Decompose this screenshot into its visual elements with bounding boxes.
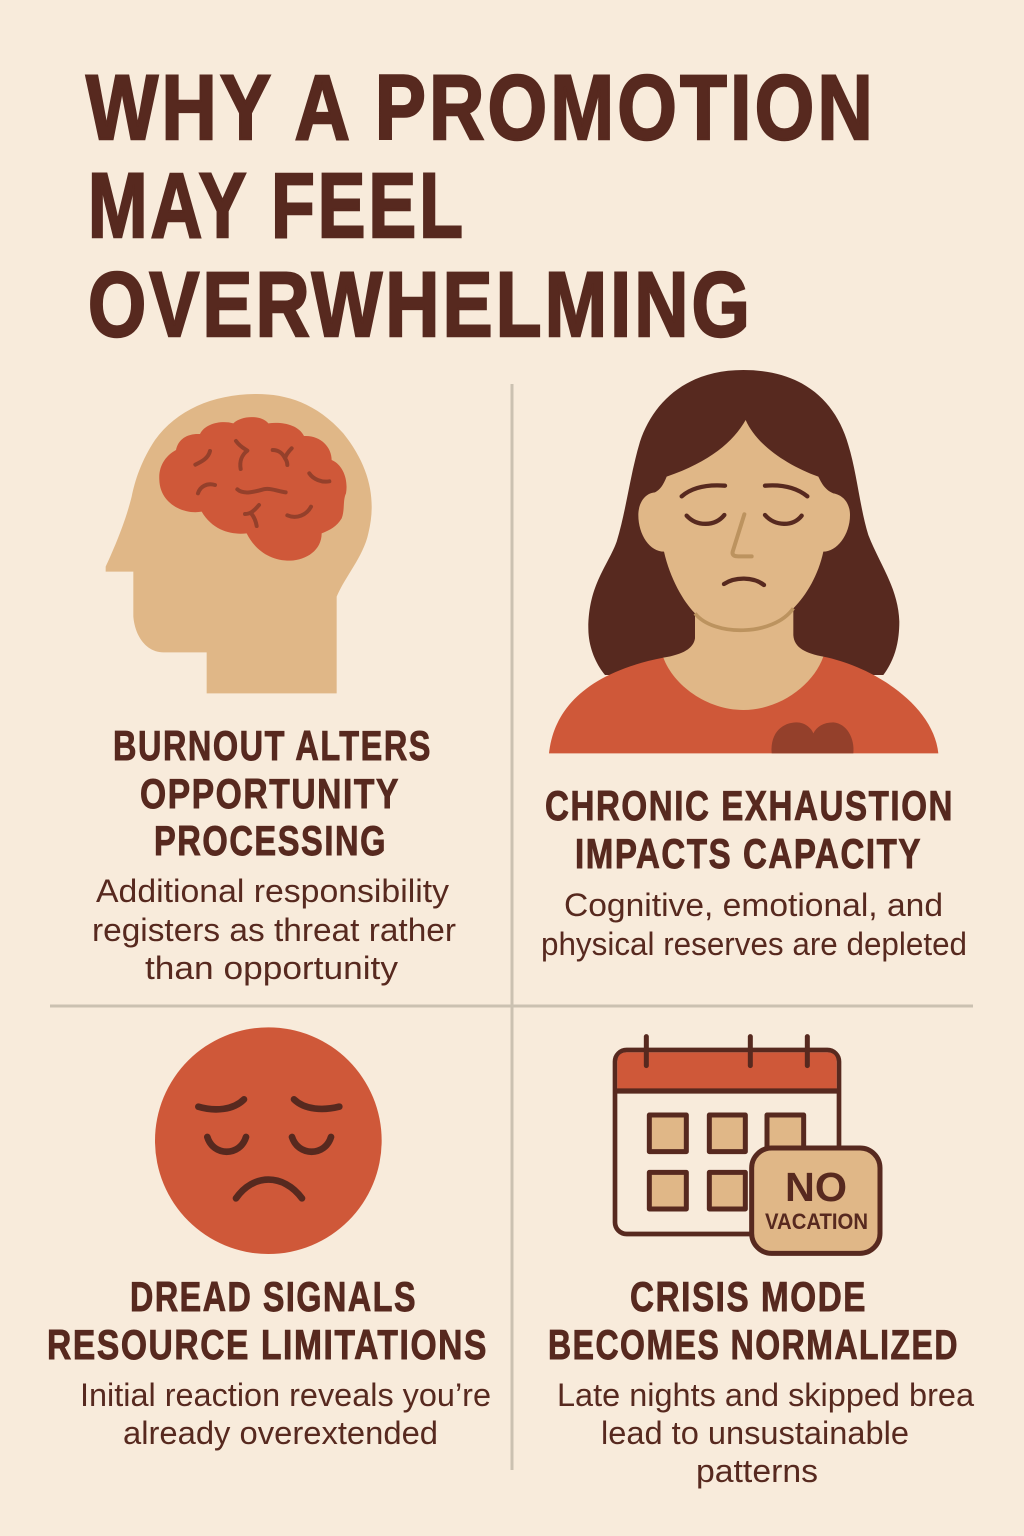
text block xyxy=(541,887,967,962)
title xyxy=(86,57,876,356)
text block: Additional responsibility xyxy=(96,873,449,909)
title: MAY FEEL xyxy=(88,155,466,257)
icon: head with brain xyxy=(106,394,372,693)
text block: than opportunity xyxy=(145,950,398,986)
text block xyxy=(557,1377,974,1489)
text block: physical reserves are depleted xyxy=(541,926,967,962)
heading: DREAD SIGNALS xyxy=(130,1273,417,1320)
panel: dread signals resource limitations xyxy=(47,1027,491,1451)
text block xyxy=(92,873,456,986)
panel: burnout alters opportunity processing xyxy=(92,394,456,986)
text block: already overextended xyxy=(123,1415,438,1451)
icon: tired woman xyxy=(549,370,938,753)
text block: Initial reaction reveals you’re xyxy=(80,1377,491,1413)
icon: sad face xyxy=(155,1027,382,1254)
heading: BURNOUT ALTERS xyxy=(113,722,432,769)
heading xyxy=(545,782,954,877)
heading: IMPACTS CAPACITY xyxy=(575,830,922,877)
text block: Late nights and skipped brea xyxy=(557,1377,974,1413)
title: WHY A PROMOTION xyxy=(86,57,876,159)
heading xyxy=(47,1273,488,1368)
heading: CRISIS MODE xyxy=(630,1273,867,1320)
text block: patterns xyxy=(696,1453,818,1489)
heading: PROCESSING xyxy=(154,817,387,864)
icon: calendar with no vacation badge: NO xyxy=(785,1164,847,1210)
heading xyxy=(113,722,432,864)
panel: crisis mode becomes normalized xyxy=(548,1037,974,1489)
text block xyxy=(80,1377,491,1451)
text block: registers as threat rather xyxy=(92,912,456,948)
text block: Cognitive, emotional, and xyxy=(564,887,943,923)
icon: calendar with no vacation badge: VACATION xyxy=(765,1209,868,1234)
heading: OPPORTUNITY xyxy=(140,770,400,817)
heading: RESOURCE LIMITATIONS xyxy=(47,1321,488,1368)
icon: calendar with no vacation badge xyxy=(615,1037,880,1253)
title: OVERWHELMING xyxy=(88,254,753,356)
text block: lead to unsustainable xyxy=(601,1415,909,1451)
panel: chronic exhaustion impacts capacity xyxy=(541,370,967,962)
heading xyxy=(548,1273,959,1368)
